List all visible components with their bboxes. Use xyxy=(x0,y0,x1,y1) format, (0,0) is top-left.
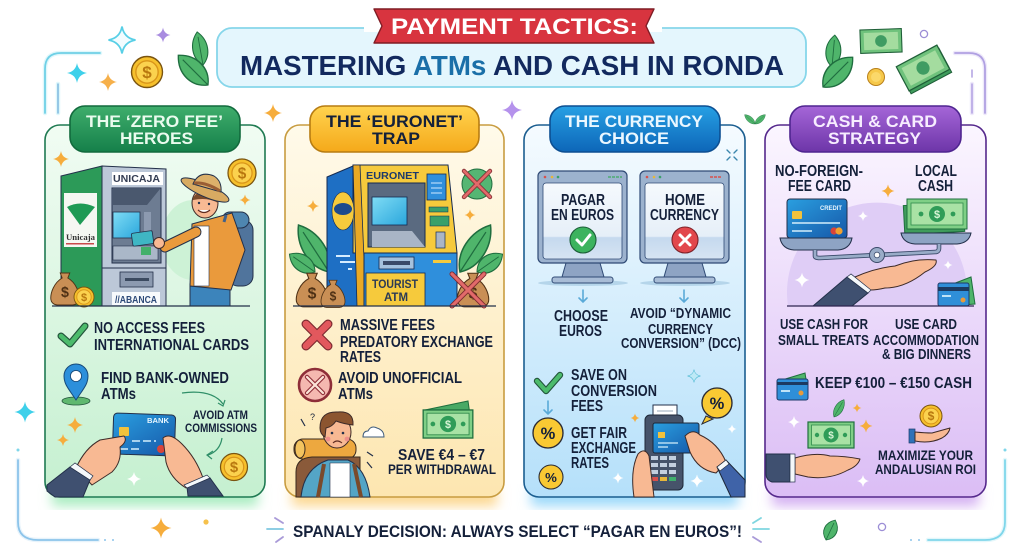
text: choose euros: EUROS xyxy=(559,323,602,340)
gutter sparkles xyxy=(14,100,767,422)
text: use card accommodation and big dinners: USE CARD xyxy=(895,316,957,333)
right burst xyxy=(753,518,769,542)
text: avoid unofficial atms: AVOID UNOFFICIAL xyxy=(338,370,462,387)
small sparkles xyxy=(53,151,250,486)
illustration: worried traveler xyxy=(294,412,373,497)
heading: the currency choice xyxy=(550,106,720,152)
text: save per withdrawal: SAVE €4 – €7 xyxy=(398,447,485,464)
label: no-foreign-fee card xyxy=(775,163,863,195)
icon: map pin xyxy=(62,364,90,405)
panel 1 background xyxy=(45,125,265,497)
text: maximize roi: ANDALUSIAN ROI xyxy=(875,461,976,477)
icon: red x xyxy=(306,324,328,346)
green background blob xyxy=(161,200,225,280)
illustration: worried traveler: ? xyxy=(310,412,315,422)
label: local cash: LOCAL xyxy=(915,163,957,180)
label: no-foreign-fee card: NO-FOREIGN- xyxy=(775,163,863,180)
text: maximize roi xyxy=(875,447,976,477)
leaves behind atm xyxy=(285,219,507,279)
illustration: balance scale: $ xyxy=(934,209,940,221)
text: save on conversion fees: SAVE ON xyxy=(571,367,627,384)
text: choose euros: CHOOSE xyxy=(554,308,608,325)
illustration: euronet atm: EURONET xyxy=(366,170,420,182)
text: use cash for small treats xyxy=(778,316,869,349)
text: no access fees: NO ACCESS FEES xyxy=(94,320,205,337)
text: save per withdrawal: PER WITHDRAWAL xyxy=(388,462,496,477)
heading: the zero fee heroes: HEROES xyxy=(120,129,193,148)
panel glows xyxy=(52,488,979,506)
text: keep cash: KEEP €100 – €150 CASH xyxy=(815,375,972,392)
panel 3 background xyxy=(524,125,745,497)
text: find bank-owned atms: ATMs xyxy=(101,386,136,403)
icon: leaf xyxy=(830,398,848,419)
label: local cash xyxy=(915,163,957,195)
text: save on conversion fees xyxy=(571,367,657,415)
arrow between check and percent xyxy=(544,401,552,414)
text: use card accommodation and big dinners: ACCOMMODATION xyxy=(873,332,979,349)
decision text: SPANALY DECISION: ALWAYS SELECT “PAGAR EN EUROS”! xyxy=(293,522,742,541)
red ribbon heading xyxy=(374,9,654,43)
white gap behind ribbon xyxy=(364,24,662,32)
heading: cash and card strategy: STRATEGY xyxy=(828,129,922,148)
text: save on conversion fees: CONVERSION xyxy=(571,383,657,400)
arrows under monitors xyxy=(579,290,688,302)
text: use card accommodation and big dinners: & BIG DINNERS xyxy=(882,346,971,363)
text: avoid unofficial atms xyxy=(338,370,462,403)
panel 4 background xyxy=(765,125,986,497)
illustration: balance scale xyxy=(780,199,971,262)
monitor: home currency xyxy=(640,171,730,286)
text: save per withdrawal xyxy=(388,447,496,477)
icon: coin above hand xyxy=(920,405,942,427)
small crosshair mark xyxy=(727,150,737,160)
text: get fair exchange rates: EXCHANGE xyxy=(571,440,636,457)
illustration: traveler xyxy=(131,173,253,306)
icon: green check xyxy=(61,326,85,344)
text: find bank-owned atms: FIND BANK-OWNED xyxy=(101,370,229,387)
text: save on conversion fees: FEES xyxy=(571,398,603,415)
icon: banknote xyxy=(808,422,854,448)
monitor: home currency: CURRENCY xyxy=(650,207,720,224)
percent speech bubble xyxy=(702,388,732,424)
heading: the currency choice: THE CURRENCY xyxy=(565,112,704,131)
ground line xyxy=(52,305,250,307)
illustration: hands holding bank card xyxy=(47,413,223,497)
illustration: unicaja atm: //ABANCA xyxy=(115,295,157,306)
panel: zero fee heroes xyxy=(45,106,265,497)
icon: wallet small xyxy=(777,373,808,400)
label: local cash: CASH xyxy=(918,178,953,195)
text: get fair exchange rates: GET FAIR xyxy=(571,425,627,442)
money bags xyxy=(296,273,345,307)
text: avoid unofficial atms: ATMs xyxy=(338,386,373,403)
money bag and coin xyxy=(51,273,94,307)
monitor: pagar en euros: PAGAR xyxy=(561,192,605,209)
illustration: euronet atm xyxy=(327,165,457,306)
bottom decision line xyxy=(267,518,769,542)
sparkles xyxy=(794,184,952,288)
icon: wallet xyxy=(938,277,975,306)
heading: the euronet trap: THE ‘EURONET’ xyxy=(326,112,463,131)
text: avoid dcc: CURRENCY xyxy=(648,322,713,338)
illustration: hands holding bank card: BANK xyxy=(147,418,169,425)
heading: cash and card strategy: CASH & CARD xyxy=(813,112,937,131)
illustration: open hand with sleeve xyxy=(813,260,936,306)
sparkles xyxy=(788,404,872,487)
text: massive fees xyxy=(340,317,493,366)
text: maximize roi: MAXIMIZE YOUR xyxy=(878,447,973,463)
top-right decorations xyxy=(816,29,952,94)
panel: currency choice xyxy=(524,106,745,497)
heading: cash and card strategy xyxy=(790,106,961,152)
monitor: home currency: HOME xyxy=(665,192,705,209)
panel 2 background xyxy=(285,125,504,497)
text: no access fees xyxy=(94,320,249,354)
panel: cash and card strategy xyxy=(765,106,986,497)
illustration: unicaja atm: Unicaja xyxy=(66,232,96,242)
heading: the zero fee heroes xyxy=(70,106,240,152)
arrow: to commissions xyxy=(182,392,225,406)
text: get fair exchange rates xyxy=(571,425,636,472)
ground line xyxy=(293,305,496,307)
sparkles xyxy=(307,200,319,212)
arrow: to coin xyxy=(207,438,222,459)
text: massive fees: PREDATORY EXCHANGE xyxy=(340,334,493,351)
text: find bank-owned atms xyxy=(101,370,229,403)
illustration: euronet atm: ATM xyxy=(384,292,408,304)
icon: banknotes xyxy=(423,401,473,438)
left burst xyxy=(267,518,283,542)
text: massive fees: RATES xyxy=(340,349,381,366)
text: avoid atm commissions xyxy=(185,408,257,435)
heading: the currency choice: CHOICE xyxy=(599,129,669,148)
text: avoid atm commissions: AVOID ATM xyxy=(193,408,248,422)
illustration: euronet atm: TOURIST xyxy=(372,279,418,291)
text: massive fees: MASSIVE FEES xyxy=(340,317,435,334)
text: avoid dcc xyxy=(621,306,741,352)
title banner xyxy=(217,9,806,87)
crossed out money bag xyxy=(452,273,489,307)
top-left decorations xyxy=(67,26,215,92)
crossed out green circle xyxy=(462,169,492,199)
percent coins xyxy=(533,418,563,489)
sparkle on atm xyxy=(464,210,476,220)
monitor: pagar en euros: EN EUROS xyxy=(551,207,614,224)
panel: euronet trap xyxy=(285,106,507,497)
text: no access fees: INTERNATIONAL CARDS xyxy=(94,337,249,354)
illustration: balance scale: CREDIT xyxy=(820,205,842,212)
title box xyxy=(217,28,806,87)
text: choose euros xyxy=(554,308,608,340)
sparkles xyxy=(612,370,736,488)
icon: cloud xyxy=(363,427,384,437)
bottom decorations xyxy=(150,517,886,543)
illustration: unicaja atm xyxy=(61,166,166,306)
coin bottom right xyxy=(220,454,248,480)
illustration: card terminal xyxy=(633,405,745,497)
main title text: MASTERING ATMs AND CASH IN RONDA xyxy=(240,50,784,81)
heading: the euronet trap xyxy=(310,106,479,152)
illustration: unicaja atm: UNICAJA xyxy=(113,174,160,185)
heading: the zero fee heroes: THE ‘ZERO FEE’ xyxy=(86,112,223,131)
text: avoid atm commissions: COMMISSIONS xyxy=(185,421,257,435)
text: use cash for small treats: USE CASH FOR xyxy=(780,316,868,333)
text: get fair exchange rates: RATES xyxy=(571,455,609,472)
text: avoid dcc: CONVERSION” (DCC) xyxy=(621,336,741,352)
icon: green check xyxy=(537,375,560,391)
text: avoid dcc: AVOID “DYNAMIC xyxy=(630,306,731,322)
coin top right xyxy=(228,159,256,187)
monitor: pagar en euros xyxy=(538,171,628,286)
ground line xyxy=(787,305,974,307)
ribbon title text: PAYMENT TACTICS: xyxy=(391,14,638,39)
text: use cash for small treats: SMALL TREATS xyxy=(778,332,869,349)
illustration: hand with sleeve xyxy=(766,454,860,482)
icon: circled x xyxy=(299,369,331,401)
lilac circle backdrop xyxy=(787,203,967,306)
heading: the euronet trap: TRAP xyxy=(372,129,420,148)
text: use card accommodation and big dinners xyxy=(873,316,979,363)
label: no-foreign-fee card: FEE CARD xyxy=(788,178,851,195)
icon: small hand xyxy=(909,428,950,443)
